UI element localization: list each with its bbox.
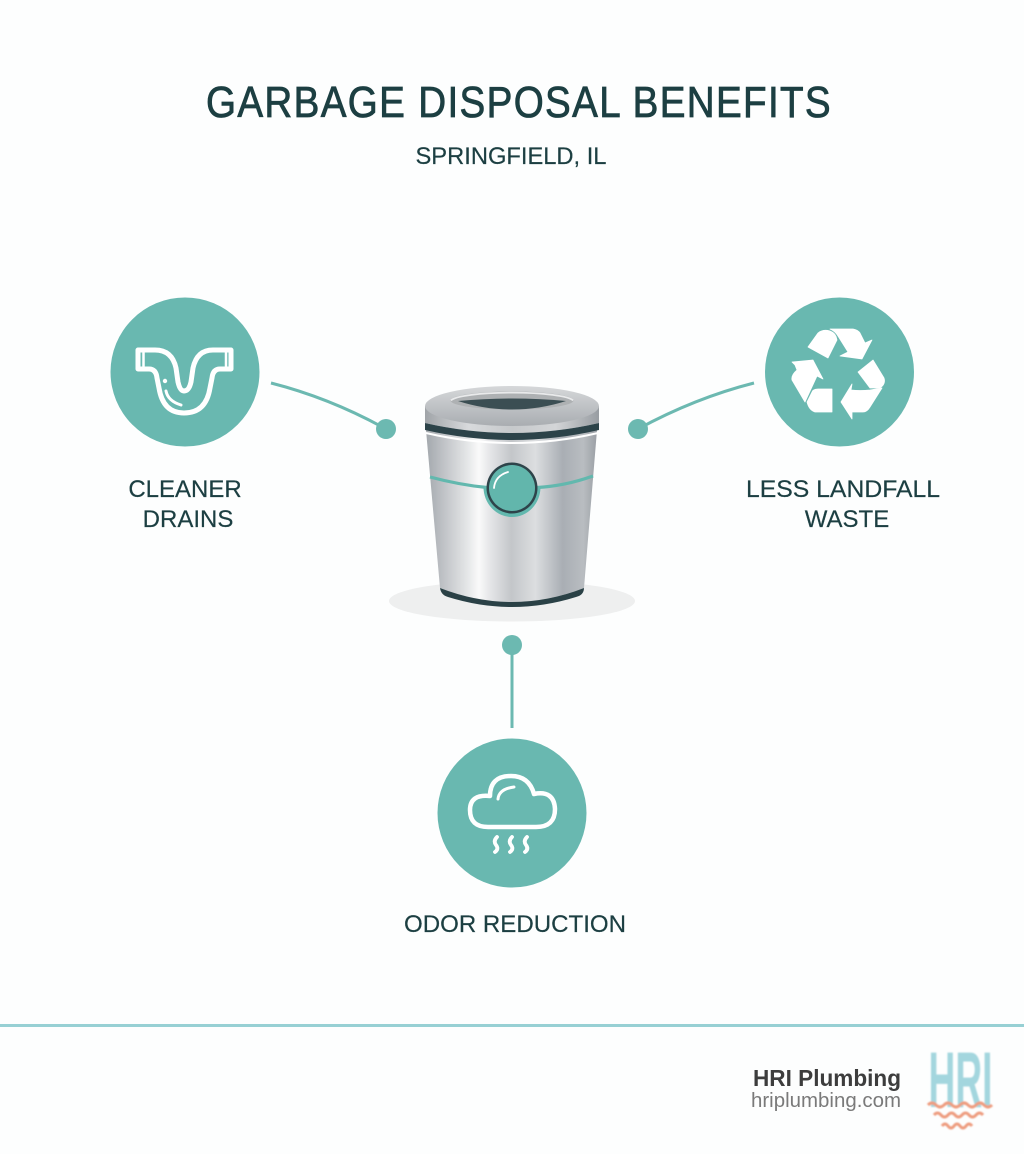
title: GARBAGE DISPOSAL BENEFITS [206, 79, 832, 127]
panel: less landfall waste [746, 298, 940, 533]
label: ODOR REDUCTION [404, 911, 626, 938]
icon: odor cloud [438, 738, 586, 888]
icon: drain pipe [110, 298, 260, 446]
connector: odor reduction [502, 635, 522, 728]
connector: less landfall waste [628, 383, 754, 439]
dark collar ring [425, 423, 599, 440]
subtitle: SPRINGFIELD, IL [416, 143, 606, 170]
disposal body [426, 430, 597, 602]
bottom band [440, 588, 584, 607]
panel: cleaner drains [110, 298, 260, 533]
connector: cleaner drains [271, 383, 396, 439]
panel: odor reduction [404, 738, 626, 938]
footer divider [0, 1024, 1024, 1027]
icon: recycling arrows [765, 298, 914, 446]
garbage disposal unit illustration [389, 386, 635, 622]
label: DRAINS [143, 506, 233, 533]
opening [458, 398, 566, 410]
indicator button [484, 487, 540, 517]
brand name: HRI Plumbing [753, 1065, 901, 1091]
label: LESS LANDFALL [746, 476, 940, 503]
label: CLEANER [128, 476, 242, 503]
teal band [430, 476, 593, 488]
footer brand [751, 1035, 992, 1128]
collar [425, 406, 599, 433]
logo [928, 1035, 992, 1128]
brand url: hriplumbing.com [751, 1090, 901, 1112]
floor shadow [389, 580, 635, 622]
label: WASTE [805, 506, 889, 533]
rim top [425, 386, 599, 426]
